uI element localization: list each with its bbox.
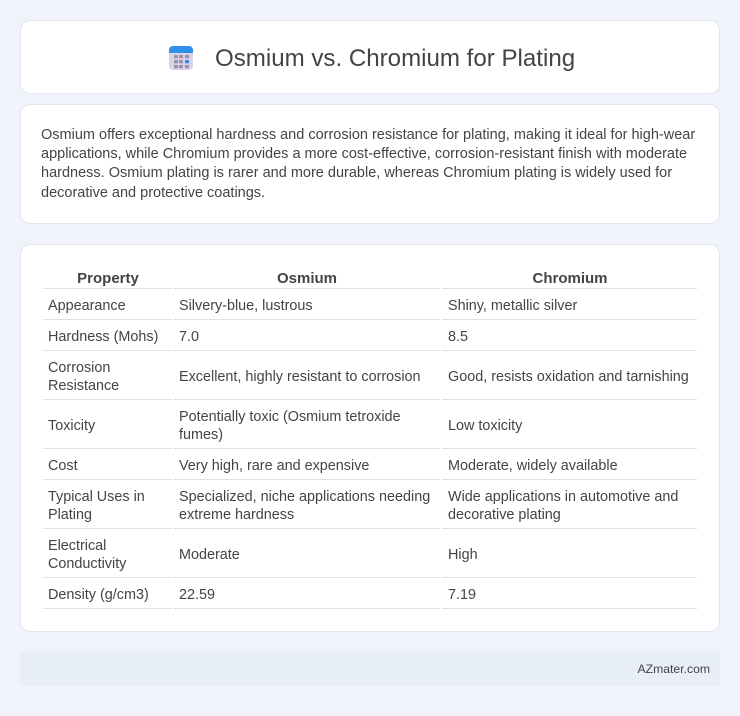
- row: Typical Uses: Typical Uses in: [48, 489, 145, 505]
- row: Typical Uses: Plating: [48, 507, 92, 523]
- table: 7.19: [448, 587, 476, 603]
- footer source: AZmater.com: [638, 662, 710, 676]
- table: 7.0: [179, 329, 199, 345]
- table: High: [448, 547, 478, 563]
- table: Good, resists oxidation and tarnishing: [448, 369, 689, 385]
- row: Electrical Conductivity: Electrical: [48, 538, 106, 554]
- intro text: applications, while Chromium provides a more cost-effective, corrosion-resistant finish with moderate: [41, 146, 687, 162]
- row: Toxicity: Toxicity: [48, 418, 95, 434]
- intro panel: [20, 104, 720, 224]
- intro text: hardness. Osmium plating is rarer and more durable, whereas Chromium plating is widely used for: [41, 165, 672, 181]
- row: Typical Uses: [48, 489, 145, 523]
- row: Appearance: Appearance: [48, 298, 126, 314]
- header: Chromium: Chromium: [532, 270, 608, 287]
- table: Low toxicity: [448, 418, 522, 434]
- row: Density: Density (g/cm3): [48, 587, 149, 603]
- intro text: decorative and protective coatings.: [41, 185, 265, 201]
- table: Very high, rare and expensive: [179, 458, 369, 474]
- header: Osmium: Osmium: [277, 270, 337, 287]
- row: Corrosion Resistance: Resistance: [48, 378, 119, 394]
- row: Electrical Conductivity: [48, 538, 126, 572]
- table: Shiny, metallic silver: [448, 298, 577, 314]
- table: Specialized, niche applications needing: [179, 489, 430, 505]
- table: decorative plating: [448, 507, 561, 523]
- table: Moderate, widely available: [448, 458, 618, 474]
- table: extreme hardness: [179, 507, 294, 523]
- table: 22.59: [179, 587, 215, 603]
- comparison table panel: [20, 244, 720, 632]
- intro text: [41, 127, 695, 201]
- table: Moderate: [179, 547, 240, 563]
- table: 8.5: [448, 329, 468, 345]
- row: Corrosion Resistance: [48, 360, 119, 394]
- row: Electrical Conductivity: Conductivity: [48, 556, 126, 572]
- intro text: Osmium offers exceptional hardness and corrosion resistance for plating, making it ideal for high-wear: [41, 127, 695, 143]
- row: Hardness: Hardness (Mohs): [48, 329, 158, 345]
- row: Cost: Cost: [48, 458, 78, 474]
- footer bar: [20, 652, 720, 686]
- icon: calendar: [169, 46, 193, 70]
- header: Property: Property: [77, 270, 139, 287]
- table: fumes): [179, 427, 223, 443]
- table: Excellent, highly resistant to corrosion: [179, 369, 421, 385]
- table: Potentially toxic (Osmium tetroxide: [179, 409, 401, 425]
- table: Wide applications in automotive and: [448, 489, 678, 505]
- title panel: [20, 20, 720, 94]
- title: Osmium vs. Chromium for Plating: [215, 45, 575, 72]
- table: Silvery-blue, lustrous: [179, 298, 313, 314]
- row: Corrosion Resistance: Corrosion: [48, 360, 110, 376]
